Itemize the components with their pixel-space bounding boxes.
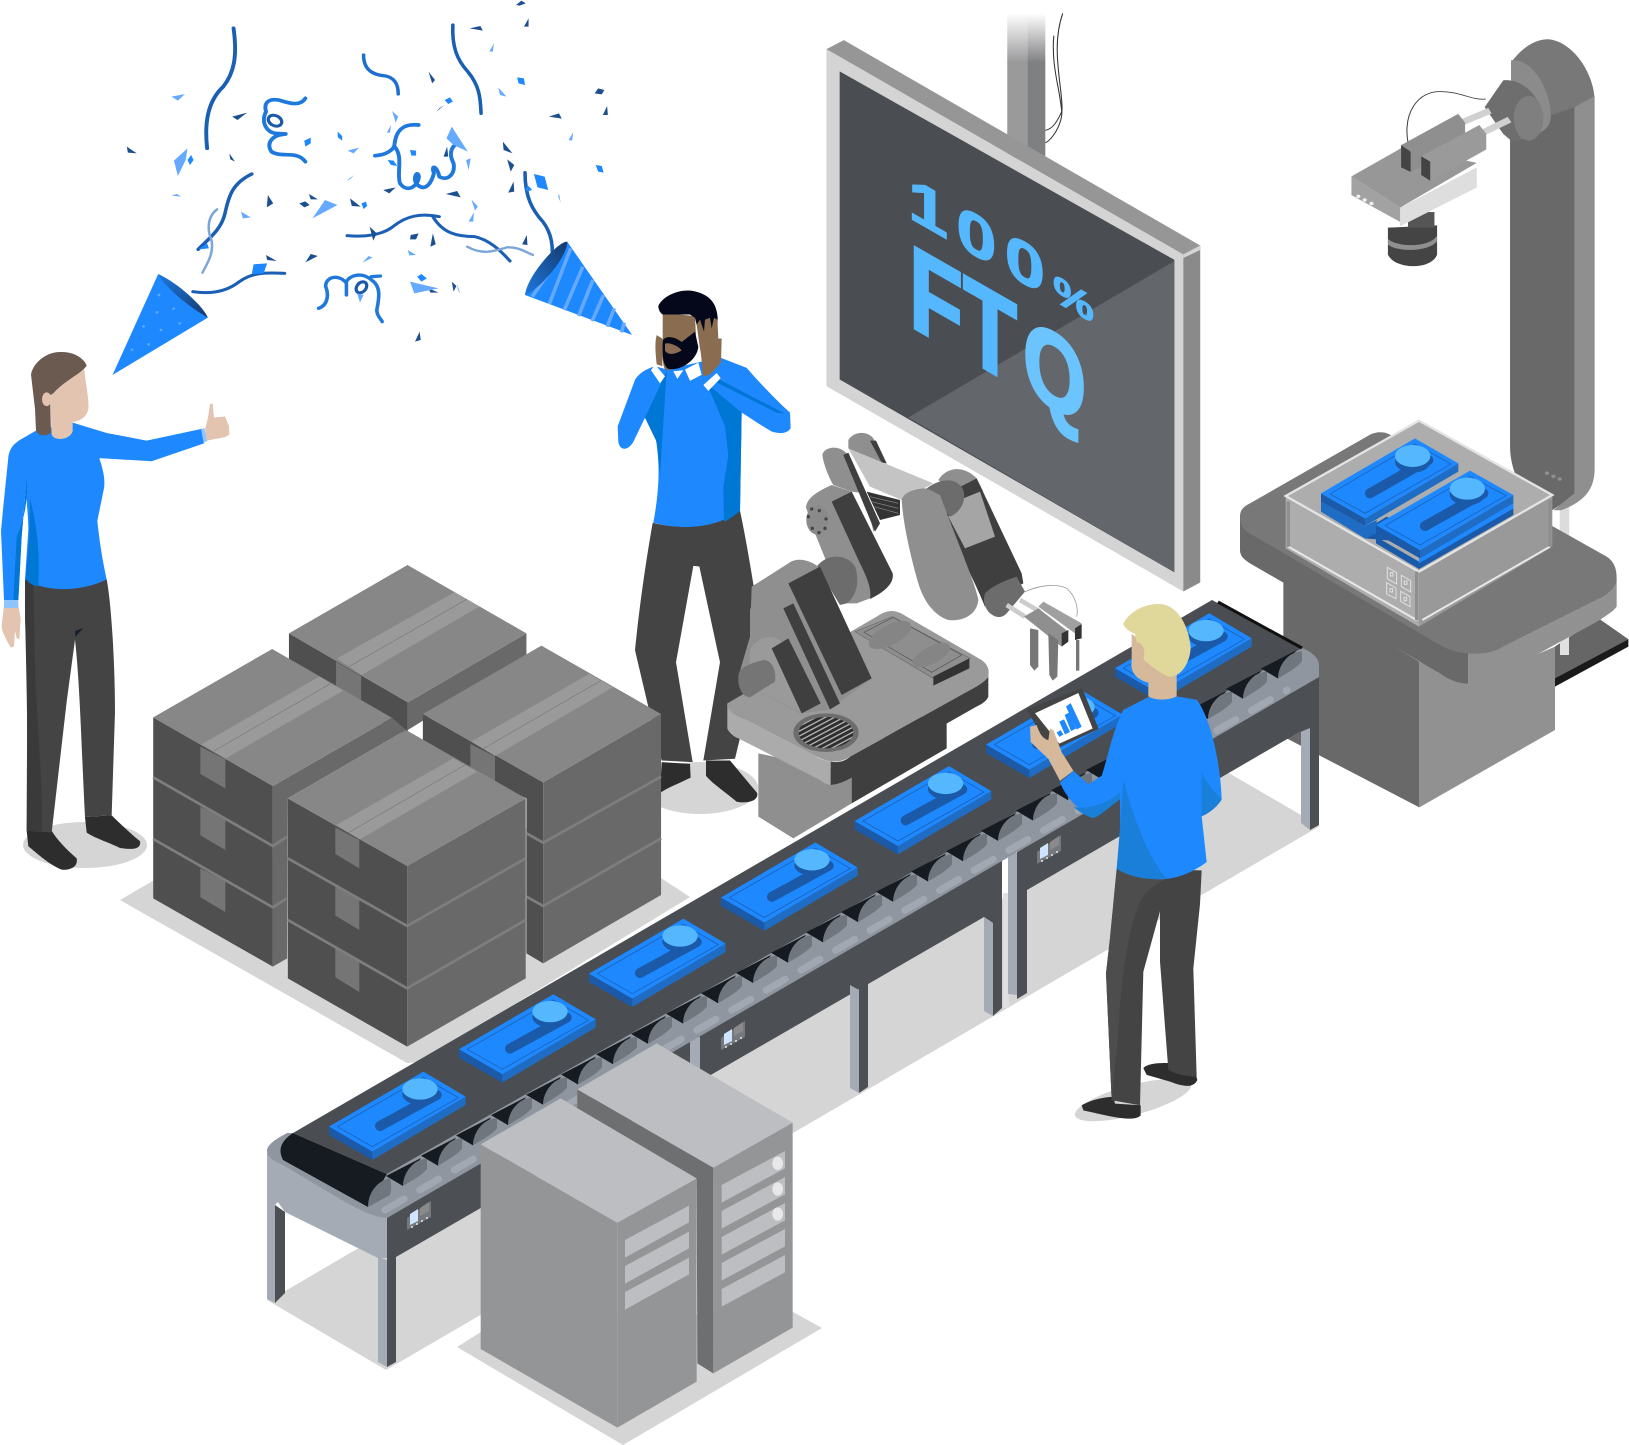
front server [481, 1098, 697, 1428]
monitor screen [840, 71, 1174, 572]
man trousers [635, 511, 760, 762]
tray on base [855, 615, 970, 686]
woman hand [2, 605, 21, 648]
camera housing [1351, 147, 1477, 226]
person: bearded man holding head [618, 291, 791, 802]
product stack in box, rear [1321, 438, 1458, 543]
camera gripper [1401, 111, 1510, 181]
ceiling pole [1006, 12, 1063, 161]
mid-blue confetti [187, 77, 604, 282]
control panels [407, 835, 1061, 1230]
product stack in box, front [1376, 471, 1513, 569]
pedestal [1283, 580, 1555, 807]
man head [658, 291, 718, 370]
man shoes [660, 760, 757, 802]
assembly robot arm on base [727, 433, 1082, 838]
woman head [31, 352, 88, 439]
floor shadows [23, 762, 1320, 1445]
ribbons [193, 25, 552, 322]
box stack: left [153, 649, 406, 967]
robot gripper [1007, 585, 1082, 681]
belt end roller [280, 1133, 387, 1207]
conveyor belt [267, 600, 1319, 1367]
open box [1286, 421, 1552, 627]
monitor with ceiling pole [826, 12, 1200, 591]
blond man head [1123, 604, 1191, 700]
conveyor legs [267, 728, 1310, 1367]
blond man trousers [1106, 869, 1202, 1105]
conveyor left end face [267, 1150, 387, 1258]
robot pedestal [758, 713, 947, 838]
woman sweater [1, 423, 207, 608]
table top [1240, 432, 1617, 684]
rollers [386, 650, 1302, 1186]
monitor frame [826, 40, 1200, 591]
server cabinets [481, 1043, 793, 1428]
rail highlight bars [385, 690, 1287, 1210]
light-blue confetti [171, 43, 573, 303]
robot base table [727, 611, 989, 785]
camera lens [1388, 212, 1437, 266]
box stack: right [423, 646, 661, 963]
screen text: 100%: 100% [908, 163, 1102, 342]
tablet with bar chart [1028, 690, 1097, 746]
screen text: FTQ: FTQ [909, 219, 1086, 452]
confetti and party poppers [112, 1, 632, 375]
robot middle arm [806, 448, 893, 605]
inspection table with packed box [1240, 421, 1628, 807]
back plate [1555, 618, 1628, 687]
woman thumb [205, 404, 229, 441]
man sweater [618, 357, 791, 527]
conveyor lower panels [387, 677, 1319, 1262]
belt surface [293, 600, 1302, 1174]
blond man sweater [1060, 696, 1222, 879]
blond man shoes [1082, 1063, 1197, 1119]
products on belt [329, 613, 1252, 1160]
camera robot arm [1351, 39, 1595, 536]
front end roller [368, 1178, 391, 1207]
robot lower housing [738, 560, 872, 713]
arm body [1485, 39, 1595, 536]
blond man forearm and hand [1030, 725, 1073, 781]
dark confetti [127, 1, 608, 342]
QR code on box [1387, 567, 1411, 607]
robot far joint and crossbar [848, 433, 933, 520]
vent grille [793, 713, 859, 752]
box stack: back [289, 565, 526, 737]
woman trousers [25, 579, 115, 832]
stacked cardboard boxes [153, 565, 661, 1047]
conveyor side rail [267, 648, 1319, 1218]
camera wire [1407, 92, 1486, 143]
right party popper [525, 242, 632, 335]
rear server [577, 1043, 793, 1373]
left party popper [112, 274, 208, 375]
person: woman giving thumbs up [1, 352, 229, 870]
woman shoes [27, 815, 140, 870]
box stack: front [288, 730, 526, 1047]
man hands [655, 318, 722, 376]
robot forearm [902, 469, 1025, 620]
person: blond man with tablet [1028, 604, 1222, 1119]
